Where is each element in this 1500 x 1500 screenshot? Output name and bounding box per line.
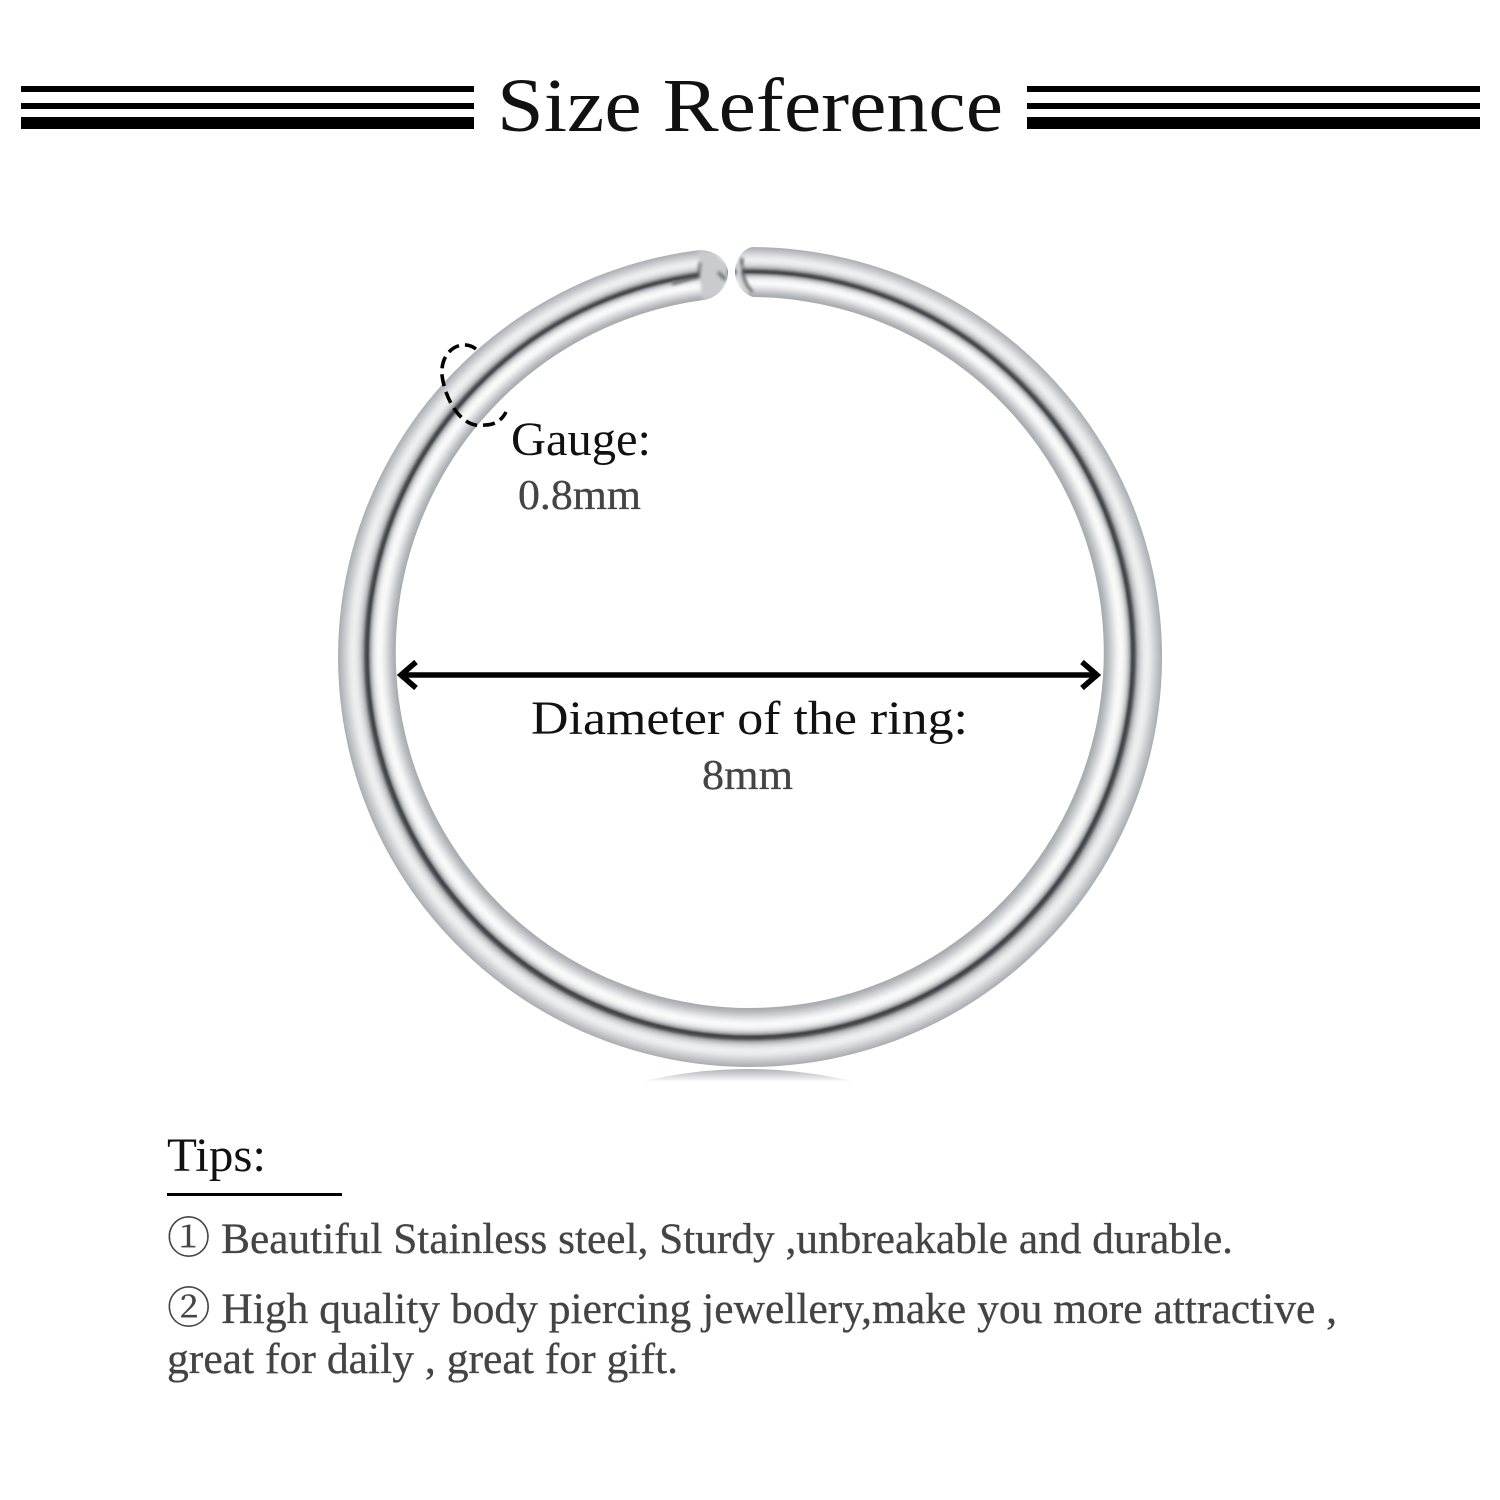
diameter value: 8mm — [702, 753, 793, 799]
diameter label: Diameter of the ring: — [531, 692, 968, 745]
tip one: ① Beautiful Stainless steel, Sturdy ,unbreakable and durable. — [167, 1216, 1233, 1263]
title: Size Reference — [497, 64, 1003, 148]
tips heading: Tips: — [167, 1129, 266, 1182]
reflection under ring — [640, 1069, 856, 1082]
header: left triple rule — [21, 86, 474, 129]
ring tip details — [672, 251, 752, 300]
tip two, second line: great for daily , great for gift. — [167, 1336, 678, 1383]
tip two, first line: ② High quality body piercing jewellery,make you more attractive , — [167, 1286, 1337, 1333]
diameter arrow — [401, 662, 1097, 688]
steel ring — [338, 247, 1162, 1067]
tips underline — [167, 1193, 342, 1196]
gauge value: 0.8mm — [518, 473, 641, 519]
gauge marker: dashed loop — [442, 345, 506, 426]
gauge label: Gauge: — [511, 413, 651, 466]
header: right triple rule — [1027, 86, 1480, 129]
